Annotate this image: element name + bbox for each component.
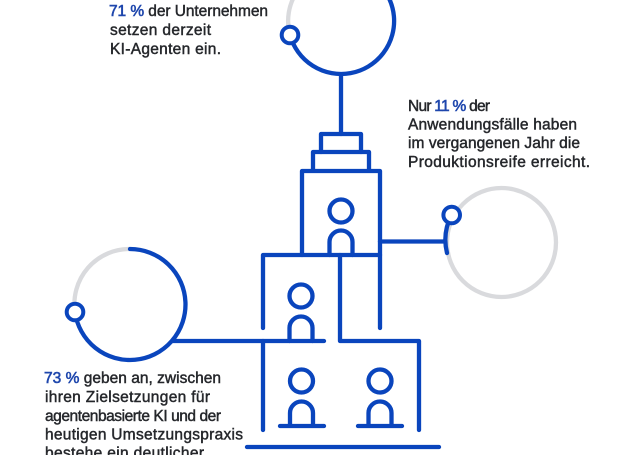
text block: 73 percent	[44, 370, 243, 455]
text block: 11 percent: Anwendungsfälle haben	[408, 116, 577, 134]
person: lower right	[358, 370, 402, 426]
text block: 71 percent	[109, 3, 268, 58]
tower base	[247, 445, 439, 449]
connector: left ring to tower	[172, 339, 324, 343]
text block: 73 percent: 73 % geben an, zwischen	[44, 370, 221, 387]
text block: 71 percent: setzen derzeit	[110, 22, 212, 39]
person: lower left	[280, 370, 324, 426]
connector: top ring to tower	[339, 76, 343, 134]
person: top	[330, 200, 352, 255]
ring: 11 percent	[443, 188, 556, 297]
text block: 11 percent: Produktionsreife erreicht.	[408, 154, 590, 171]
person: middle	[290, 284, 312, 341]
text block: 71 percent: KI-Agenten ein.	[110, 41, 221, 58]
tower middle block	[263, 255, 419, 430]
text block: 73 percent: agentenbasierte KI und der	[45, 408, 221, 425]
tower upper block	[302, 171, 380, 255]
text block: 11 percent: Nur 11 % der	[408, 98, 490, 115]
connector: tower to right ring	[380, 239, 445, 244]
tower top	[313, 134, 369, 170]
text block: 71 percent: 71 % der Unternehmen	[109, 3, 268, 20]
text block: 11 percent: im vergangenen Jahr die	[408, 135, 580, 152]
text block: 73 percent: heutigen Umsetzungspraxis	[45, 426, 243, 444]
tower lower block	[261, 341, 265, 430]
text block: 73 percent: ihren Zielsetzungen für	[45, 389, 210, 406]
ring: 71 percent	[282, 0, 394, 74]
ring: 73 percent	[67, 249, 185, 360]
text block: 11 percent	[408, 98, 590, 171]
